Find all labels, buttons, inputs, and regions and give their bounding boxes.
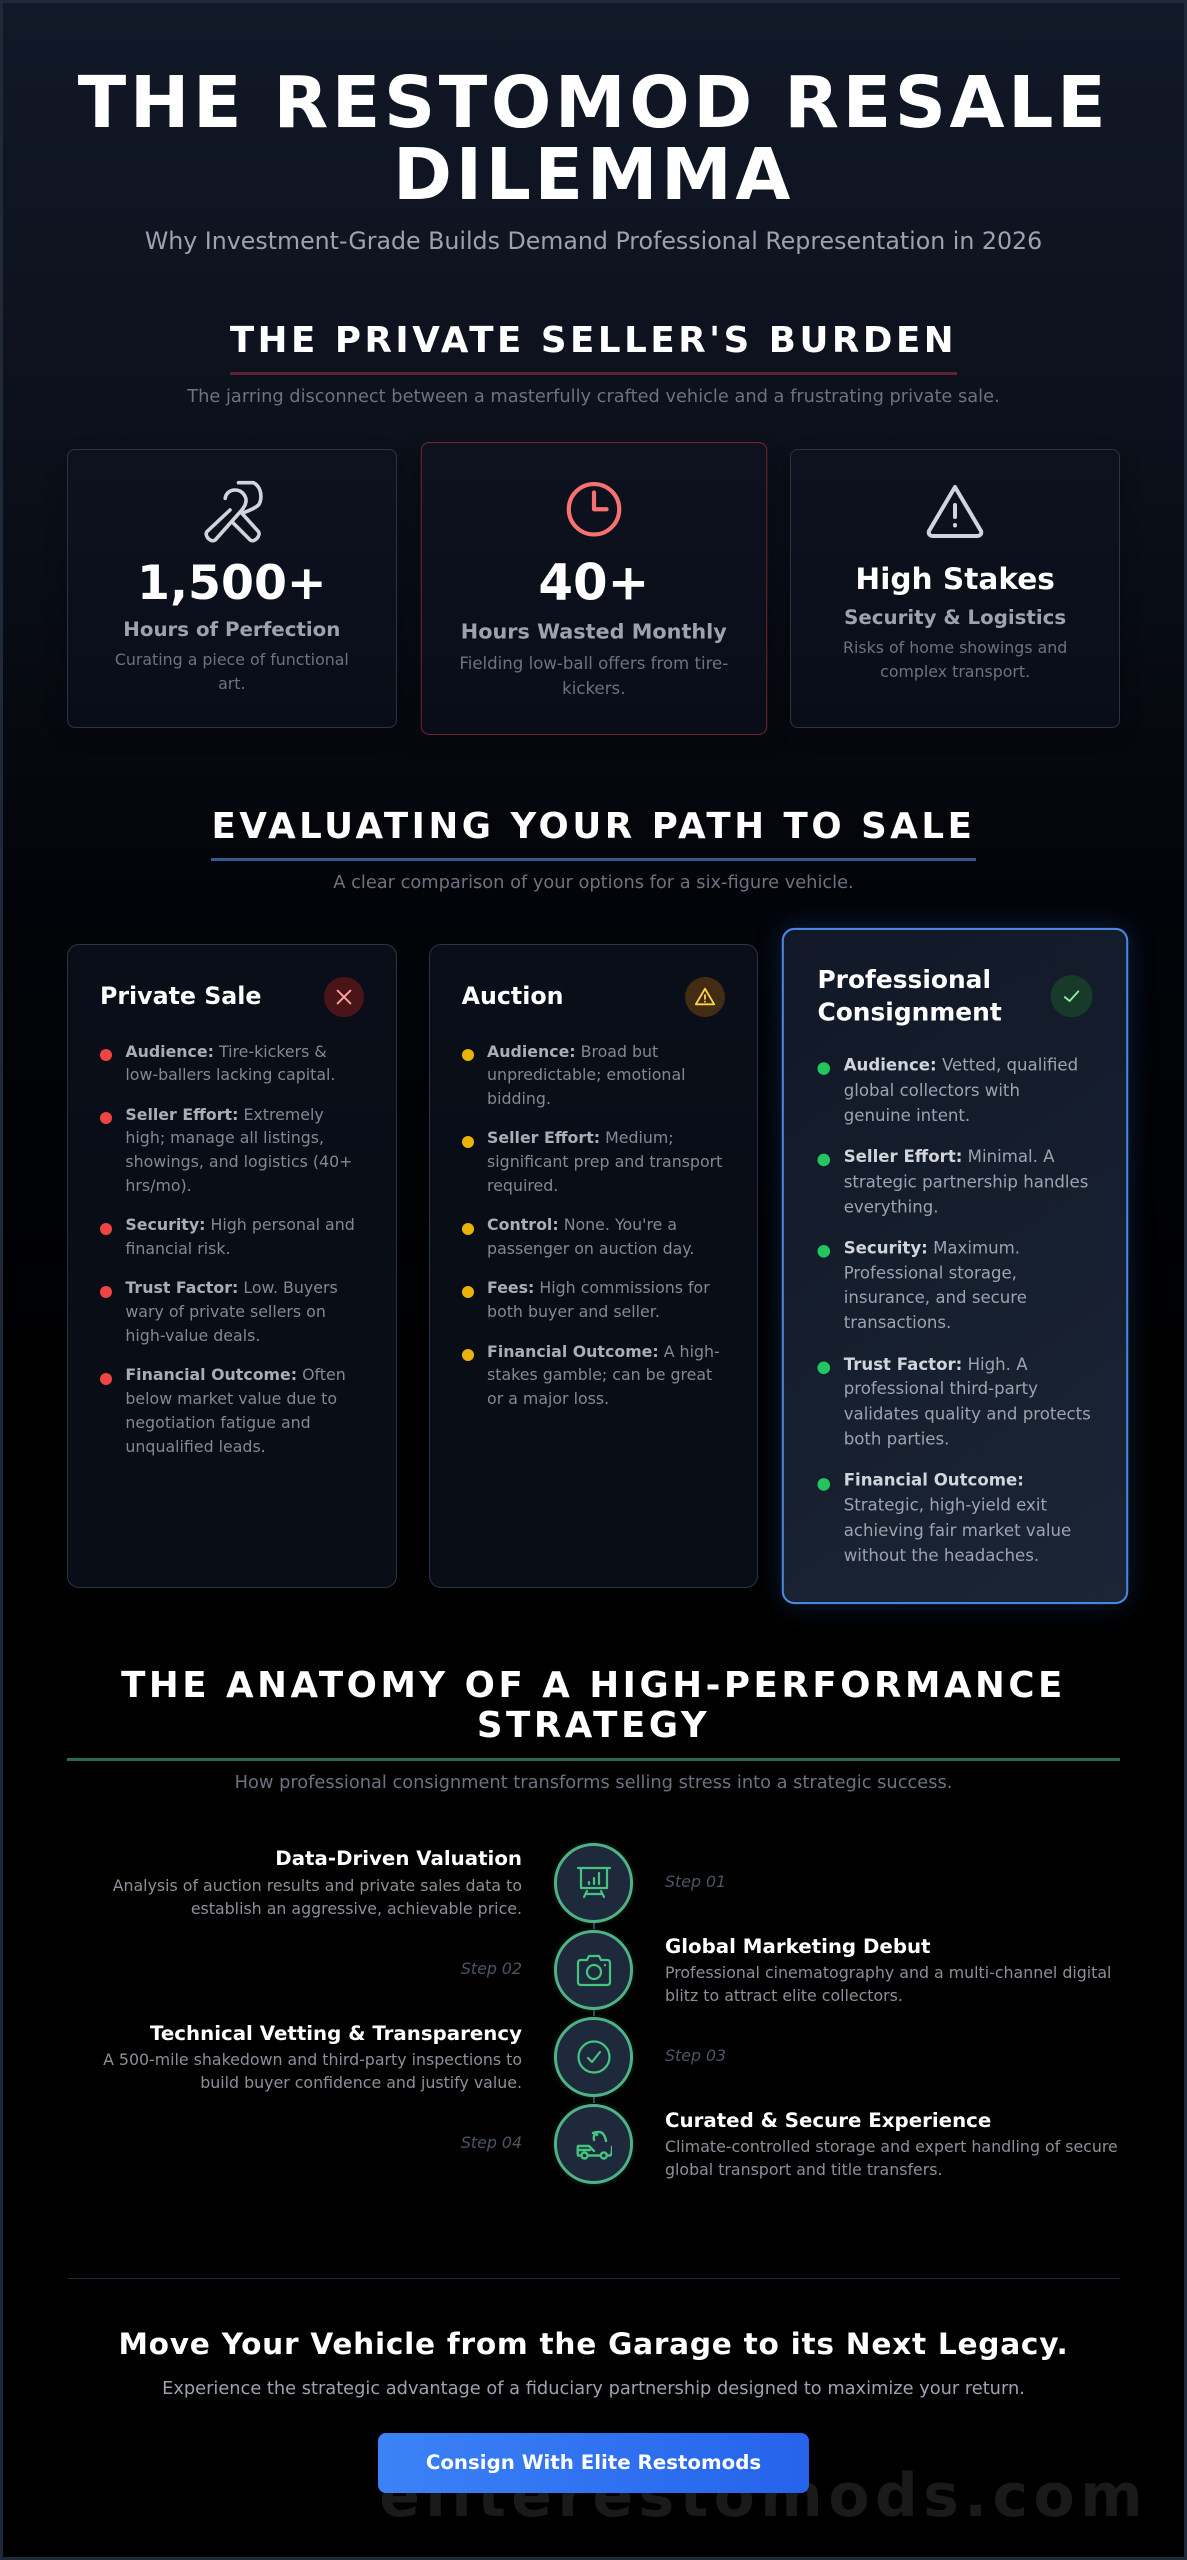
feature list: showings, and logistics (40+ [125,1152,352,1171]
step 2 title: Global Marketing Debut [665,1934,931,1958]
feature list: high; manage all listings, [125,1128,324,1147]
card header [462,977,725,1017]
step 4 description: global transport and title transfers. [665,2160,942,2179]
feature list [462,1042,722,1408]
feature list: Seller Effort: Medium; [487,1128,674,1147]
feature list: Security: Maximum. [844,1237,1020,1257]
panel: auction [429,944,758,1588]
feature list: Control: None. You're a [487,1215,677,1234]
watermark: eliterestomods.com [379,2461,1148,2531]
icon: tools [204,480,263,542]
step 3 description: A 500-mile shakedown and third-party inspections to [103,2050,522,2068]
feature list: everything. [844,1196,939,1216]
feature list: low-ballers lacking capital. [125,1065,335,1084]
section heading: anatomy [121,1665,1066,1746]
section description: burden: The jarring disconnect between a masterfully crafted vehicle and a frustrating private sale. [187,386,1000,406]
feature list: stakes gamble; can be great [487,1365,712,1384]
feature list: Strategic, high-yield exit [844,1495,1047,1515]
feature list: passenger on auction day. [487,1239,694,1258]
stat description [843,638,1067,680]
footer divider [68,2278,1120,2279]
step 2 label: Step 02 [461,1959,522,1978]
stat value: High Stakes [855,562,1055,596]
feature list: financial risk. [125,1239,230,1258]
feature list: strategic partnership handles [844,1171,1089,1191]
feature list: Professional storage, [844,1262,1017,1282]
main title [78,61,1109,216]
feature list: Seller Effort: Minimal. A [844,1146,1055,1166]
call to action heading: Move Your Vehicle from the Garage to its Next Legacy. [118,2327,1069,2361]
stat description: Curating a piece of functional [115,650,349,669]
stat description: complex transport. [880,662,1030,680]
step 4 label: Step 04 [461,2133,522,2152]
main title: THE RESTOMOD RESALE [78,61,1109,144]
step 2 description: blitz to attract elite collectors. [665,1986,903,2005]
step 3 label: Step 03 [665,2046,726,2065]
feature list [817,1055,1091,1565]
step 4 node [554,2104,633,2184]
step 2 node [554,1930,633,2010]
feature list: Financial Outcome: A high- [487,1342,720,1360]
heading underline: path [211,858,976,861]
icon: clock [566,482,622,536]
card header: Private Sale [100,982,261,1010]
feature list: Seller Effort: Extremely [125,1105,324,1124]
panel: professional consignment [782,928,1128,1604]
feature list: global collectors with [844,1080,1020,1100]
stat label: Hours of Perfection [123,618,340,641]
stat value: 1,500+ [137,556,327,611]
feature list: transactions. [844,1312,952,1332]
step 1 title: Data-Driven Valuation [275,1846,522,1870]
feature list: required. [487,1176,558,1195]
icon: warning badge [685,976,725,1016]
feature list: professional third-party [844,1379,1038,1399]
step 1 description [112,1876,522,1918]
step 1 description: establish an aggressive, achievable price. [191,1899,522,1918]
section heading: burden: THE PRIVATE SELLER'S BURDEN [230,320,957,360]
step 4 description [665,2136,1118,2179]
step 1 node [554,1843,633,1922]
step 2 description [665,1962,1111,2005]
step 3 node [554,2017,633,2096]
feature list: Fees: High commissions for [487,1278,710,1297]
call to action button [378,2433,809,2493]
icon: camera [576,1954,612,1986]
feature list: Audience: Tire-kickers & [125,1042,327,1060]
card header [100,977,364,1017]
step 3 description [103,2050,522,2092]
feature list: significant prep and transport [487,1152,722,1171]
stat value: 40+ [538,554,649,612]
feature list: unpredictable; emotional [487,1065,686,1084]
feature list: genuine intent. [844,1105,971,1125]
icon: transport truck [576,2130,612,2160]
step 2 description: Professional cinematography and a multi-channel digital [665,1962,1111,1982]
section heading: path: EVALUATING YOUR PATH TO SALE [212,806,975,847]
heading underline: burden [230,372,957,375]
stat label: Security & Logistics [844,606,1066,628]
timeline connector [592,1919,594,1929]
stat description [459,653,728,698]
section description: path: A clear comparison of your options for a six-figure vehicle. [333,872,854,893]
card header: Professional [818,964,991,994]
icon: check badge [1051,975,1093,1017]
heading underline: anatomy [67,1758,1120,1761]
feature list: hrs/mo). [125,1176,192,1195]
feature list: or a major loss. [487,1389,609,1408]
panel: stat 40+ hours [420,442,767,734]
feature list: unqualified leads. [125,1437,266,1456]
panel: private sale [67,944,397,1588]
feature list: negotiation fatigue and [125,1413,311,1432]
feature list: insurance, and secure [844,1287,1027,1307]
feature list: Trust Factor: High. A [844,1354,1028,1374]
step 1 description: Analysis of auction results and private sales data to [113,1876,522,1894]
icon: presentation chart [576,1866,611,1898]
feature list: Audience: Broad but [487,1042,658,1060]
stat description: art. [218,674,246,693]
section heading: anatomy: THE ANATOMY OF A HIGH-PERFORMANCE [121,1665,1066,1706]
icon: warning triangle [926,484,984,538]
step 3 title: Technical Vetting & Transparency [150,2022,522,2044]
feature list: below market value due to [125,1389,337,1408]
card header: Consignment [818,997,1002,1026]
section heading: anatomy: STRATEGY [477,1705,710,1746]
call to action description: Experience the strategic advantage of a fiduciary partnership designed to maximize your return. [162,2378,1025,2398]
feature list: high-value deals. [125,1326,260,1345]
feature list [100,1042,355,1456]
stat label: Hours Wasted Monthly [460,619,727,644]
main title: DILEMMA [393,133,794,216]
icon: check circle [577,2040,611,2074]
timeline connector [592,2093,594,2103]
section description: anatomy: How professional consignment transforms selling stress into a strategic success. [235,1772,952,1793]
call to action button: Consign With Elite Restomods [426,2451,761,2474]
feature list: both parties. [844,1429,950,1449]
step 3 description: build buyer confidence and justify value. [200,2073,522,2092]
feature list: achieving fair market value [844,1520,1072,1540]
feature list: wary of private sellers on [125,1302,326,1321]
stat description: kickers. [562,678,625,698]
feature list: bidding. [487,1089,551,1108]
step 4 title: Curated & Secure Experience [665,2108,991,2132]
step 4 description: Climate-controlled storage and expert handling of secure [665,2136,1118,2156]
timeline connector [592,2006,594,2016]
card header: Auction [462,982,563,1010]
stat description: Fielding low-ball offers from tire- [459,653,728,673]
icon: cross badge [324,976,364,1016]
panel: stat high stakes [790,449,1120,728]
feature list: validates quality and protects [844,1404,1091,1424]
feature list: both buyer and seller. [487,1302,660,1321]
feature list: without the headaches. [844,1545,1039,1565]
stat description: Risks of home showings and [843,638,1067,656]
stat description [115,650,349,693]
feature list: Security: High personal and [125,1215,355,1234]
feature list: Financial Outcome: Often [125,1365,346,1384]
feature list: Financial Outcome: [844,1470,1024,1490]
feature list: Audience: Vetted, qualified [844,1055,1078,1075]
step 1 label: Step 01 [665,1872,726,1891]
panel: stat 1,500+ hours [67,449,397,728]
subtitle: Why Investment-Grade Builds Demand Professional Representation in 2026 [145,227,1042,255]
feature list: Trust Factor: Low. Buyers [125,1278,338,1297]
card header [818,964,1092,1026]
